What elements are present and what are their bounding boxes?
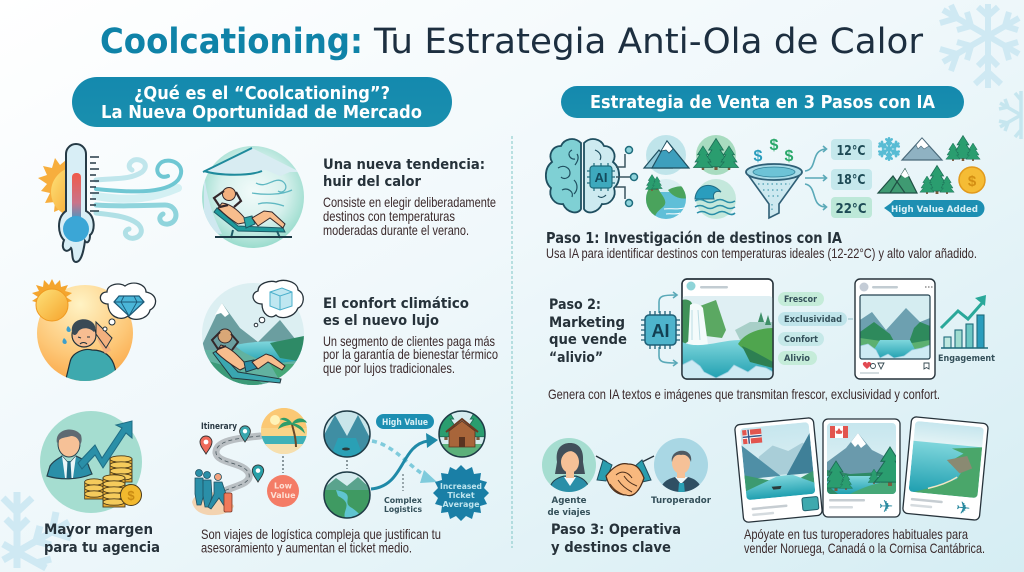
text block: confort climatico: por la garantía de bienestar térmico [323,346,498,362]
text block: una nueva tendencia: destinos con temperaturas [323,208,455,224]
text block: confort climatico [323,296,498,376]
diagram: high value complex logistics: Logistics [384,505,422,514]
diagram: itinerary low value route: Low [274,482,293,490]
attribute tags: Frescor [784,295,818,305]
attribute tags: Exclusividad [784,315,842,325]
column divider [511,136,513,548]
text block: confort climatico: es el nuevo lujo [323,313,439,329]
diagram: high value complex logistics: High Value [382,418,428,428]
icon: agent with rising arrow and coins [40,411,142,513]
heading: paso 2: “alivio” [549,350,603,366]
heading: paso 3: Paso 3: Operativa [551,522,681,538]
temperature chips: 12°C [836,144,866,159]
heading: paso 2: que vende [549,332,627,348]
diagram: itinerary low value route [192,408,308,515]
destination card: Noruega [734,417,823,523]
text block: confort climatico: que por lujos tradicionales. [323,360,455,376]
heading pill: estrategia de venta [561,86,964,118]
icon row: mountains, trees, coin: $ [968,173,977,190]
destination card: Cornisa Cantabrica [902,416,988,520]
text block: una nueva tendencia: Una nueva tendencia: [323,157,485,173]
bar chart: engagement: Engagement [938,354,995,364]
diagram: high value complex logistics [324,407,491,521]
icon row: mountains, trees, coin [878,166,985,194]
title: Coolcationing: [100,22,363,62]
text block: paso 1: Paso 1: Investigación de destinos con IA [546,229,842,247]
attribute tags: Confort [784,335,818,345]
text block: una nueva tendencia: Consiste en elegir deliberadamente [323,194,496,210]
text block: logistica compleja: Son viajes de logística compleja que justifican tu [201,526,441,542]
icon: relaxing in mountain lake landscape [202,280,304,390]
image card: waterfall [682,279,773,379]
temperature chips: 18°C [836,173,866,188]
diagram: high value complex logistics: Increased [440,482,482,491]
icon: hot person dreaming of a diamond [32,279,156,383]
icon: funnel with dollars: $ [754,148,763,165]
temperature chips: 22°C [836,202,866,217]
icon: AI brain [546,139,638,212]
text block: paso 3 description: Apóyate en tus turoperadores habituales para [744,526,968,542]
arrows: funnel to temperatures [805,146,826,210]
attribute tags: Alivio [784,354,810,364]
labels: agent and operator: de viajes [548,508,590,518]
icon: funnel with dollars: $ [785,148,794,165]
social media post card [855,279,935,379]
icon: AI brain: AI [594,170,608,185]
icon: funnel with dollars [746,137,802,218]
text block: logistica compleja [201,526,441,556]
text block: paso 3 description [744,526,985,556]
icon: tour operator [654,438,708,494]
diagram: high value complex logistics: Complex [384,496,423,505]
labels: agent and operator: Agente [552,496,587,506]
destination card: Canada: ✈ [879,497,893,517]
heading: paso 2 [549,297,627,366]
temperature chips [831,139,872,218]
heading: mayor margen: Mayor margen [44,522,153,538]
icon: AI chip with arrows [641,292,680,366]
text block: logistica compleja: asesoramiento y aumentan el ticket medio. [201,540,412,556]
bar chart: engagement [938,295,995,364]
labels: agent and operator [548,496,712,518]
text block: confort climatico: El confort climático [323,296,469,312]
diagram: itinerary low value route: Itinerary [201,422,237,432]
heading: paso 2: Marketing [549,315,625,331]
title [100,22,924,62]
icon row: snowflake, mountain, trees [878,136,980,161]
label pill: high value added: High Value Added [891,205,978,215]
icon: travel agent [542,438,596,494]
heading: paso 3 [551,522,681,556]
diagram: high value complex logistics: Average [442,500,480,509]
text block: una nueva tendencia [323,157,496,238]
icon: person relaxing under canopy [202,146,304,248]
icon: AI chip with arrows: AI [652,321,670,341]
heading: paso 2: Paso 2: [549,297,601,313]
heading pill: que es coolcationing: ¿Qué es el “Coolcationing”? [134,84,390,104]
diagram: itinerary low value route: Value [270,491,296,500]
text block: paso 1 [546,229,977,261]
icon: funnel with dollars: $ [770,137,779,154]
icon: handshake [596,456,654,496]
destination card: Cornisa Cantabrica: ✈ [955,498,971,519]
heading: mayor margen [44,522,160,556]
diagram: high value complex logistics: Ticket [447,491,475,500]
icon: melting thermometer with sun and wind [38,144,181,262]
heading: paso 3: y destinos clave [551,540,671,556]
destination card: Canada [823,419,906,517]
icon group: destination types [644,135,739,220]
label pill: high value added [884,200,984,217]
heading pill: que es coolcationing: La Nueva Oportunidad de Mercado [101,103,422,123]
title: Tu Estrategia Anti-Ola de Calor [373,22,924,62]
text block: confort climatico: Un segmento de clientes paga más [323,333,495,349]
icon: agent with rising arrow and coins: $ [127,488,135,503]
heading pill: estrategia de venta: Estrategia de Venta en 3 Pasos con IA [590,92,935,113]
heading pill: que es coolcationing [72,77,452,127]
text block: una nueva tendencia: huir del calor [323,174,422,190]
attribute tags [778,292,853,365]
labels: agent and operator: Turoperador [651,496,712,506]
heading: mayor margen: para tu agencia [44,540,160,556]
text block: una nueva tendencia: moderadas durante el verano. [323,222,469,238]
